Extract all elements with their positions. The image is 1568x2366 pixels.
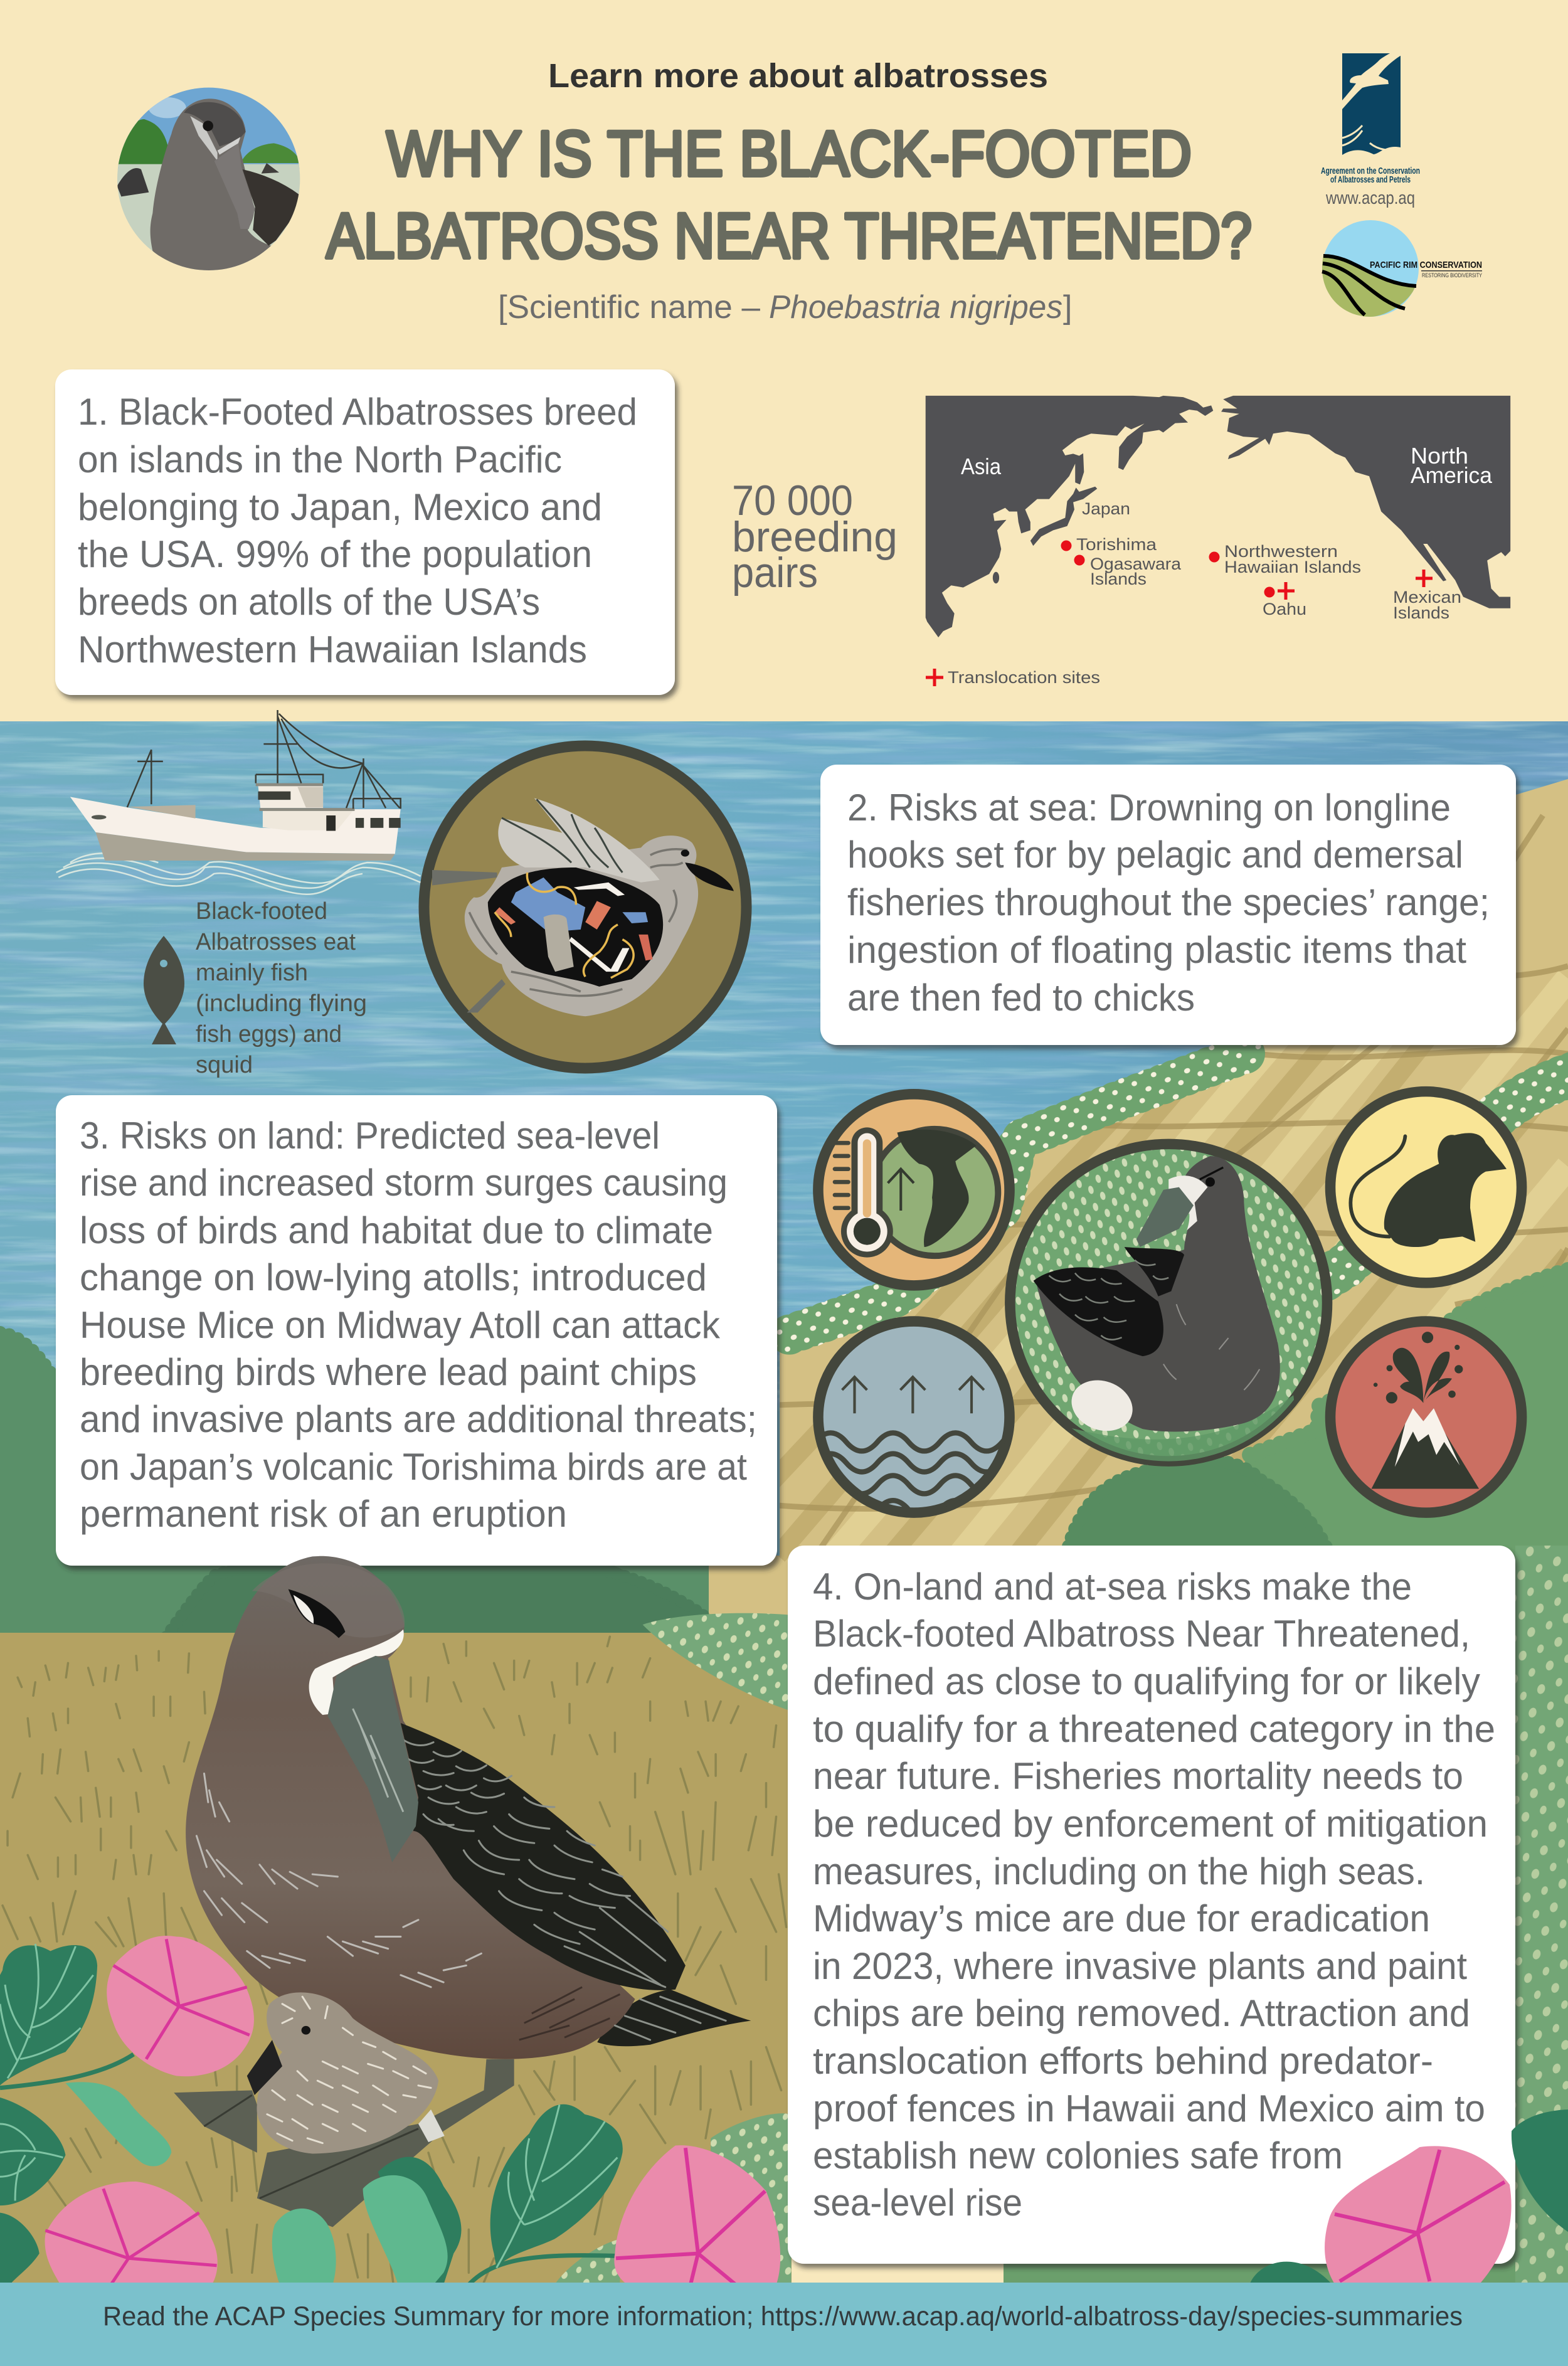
panel: card 2 risks at sea [820, 765, 1516, 1045]
panel: card 1 breeding [55, 369, 675, 695]
panel: card 2 risks at sea: fisheries throughout the species’ range; [847, 881, 1490, 923]
panel: card 4 near threatened: sea-level rise [813, 2182, 1022, 2224]
illustration: albatross on egg in circle [1010, 1144, 1327, 1478]
logo: Pacific Rim Conservation: RESTORING BIODIVERSITY [1422, 272, 1482, 279]
background: beach [690, 779, 1568, 1662]
chick tag [418, 2109, 445, 2142]
leaf 4 [0, 2213, 40, 2284]
illustration: fishing boat [56, 853, 421, 894]
eye [289, 1589, 345, 1638]
background: grass strokes [3, 1637, 787, 2283]
stat: 70 000 breeding pairs: pairs [732, 549, 818, 597]
illustration: flowers and leaves left [0, 1936, 780, 2284]
footer [0, 2283, 1568, 2366]
title: WHY IS THE BLACK-FOOTED [386, 118, 1192, 189]
chick beak [247, 2040, 282, 2095]
panel: card 4 near threatened: Black-footed Albatross Near Threatened, [813, 1613, 1470, 1655]
map: North Pacific: Northwestern [1224, 542, 1338, 561]
flower 2 [45, 2182, 218, 2284]
small leaf [1250, 2262, 1332, 2284]
map: North Pacific: Oahu [1263, 600, 1306, 618]
pink flower [1325, 2146, 1512, 2284]
logo: ACAP: of Albatrosses and Petrels [1330, 174, 1411, 185]
illustration: plastic in chick circle [424, 746, 746, 1068]
scientific name: ] [1063, 289, 1072, 326]
panel: card 4 near threatened: be reduced by enforcement of mitigation [813, 1803, 1488, 1845]
logo: ACAP: www.acap.aq [1325, 188, 1415, 208]
adult wing [401, 1723, 686, 1990]
panel: card 4 near threatened: measures, including on the high seas. [813, 1850, 1425, 1892]
map: North Pacific: Asia [961, 454, 1002, 479]
panel: card 1 breeding: the USA. 99% of the population [78, 533, 592, 575]
map: North Pacific: America [1411, 462, 1493, 488]
panel: card 1 breeding: belonging to Japan, Mexico and [78, 486, 602, 528]
text: diet: (including flying [196, 990, 367, 1017]
panel: card 4 near threatened: establish new colonies safe from [813, 2135, 1343, 2177]
map: North Pacific: Ogasawara [1090, 554, 1182, 573]
eye white [294, 1595, 314, 1624]
adult body [186, 1556, 635, 2059]
under-tail dark marks [519, 1987, 620, 2040]
panel: card 2 risks at sea: 2. Risks at sea: Drowning on longline [847, 787, 1451, 829]
beak [327, 1656, 418, 1862]
background: brown ground [0, 1633, 792, 2285]
flower 3 [614, 2145, 780, 2284]
panel: card 4 near threatened: proof fences in Hawaii and Mexico aim to [813, 2087, 1485, 2130]
icon: fish [144, 936, 184, 1044]
background: dotted shoreline strip [780, 1054, 1245, 1338]
body feather marks [196, 1773, 481, 1987]
logo: Pacific Rim Conservation [1322, 220, 1482, 317]
logo: ACAP: Agreement on the Conservation [1321, 166, 1420, 176]
panel: card 4 near threatened [788, 1546, 1515, 2264]
leaf 6 [363, 2157, 462, 2284]
map: North Pacific: Torishima [1076, 535, 1157, 554]
stat: 70 000 breeding pairs: 70 000 [732, 477, 853, 524]
background: sea [0, 721, 1568, 1662]
text: diet: Albatrosses eat [196, 929, 356, 955]
map: North Pacific: Translocation sites [948, 668, 1100, 687]
stem [0, 2054, 134, 2088]
panel: card 3 risks on land: on Japan’s volcanic Torishima birds are at [80, 1446, 747, 1488]
panel: card 3 risks on land: breeding birds where lead paint chips [80, 1351, 697, 1393]
panel: card 2 risks at sea: are then fed to chicks [847, 977, 1195, 1019]
footer: Read the ACAP Species Summary for more information; https://www.acap.aq/world-albatross-day/species-summaries [103, 2301, 1463, 2332]
adult tail [597, 1990, 751, 2046]
panel: card 3 risks on land [56, 1095, 777, 1566]
photo: black-footed albatross [115, 86, 303, 274]
title: ALBATROSS NEAR THREATENED? [326, 200, 1252, 272]
scientific name: Phoebastria nigripes [769, 289, 1062, 326]
text: diet: fish eggs) and [196, 1021, 342, 1048]
leaf 5 light [272, 2209, 336, 2284]
panel: card 1 breeding: breeds on atolls of the USA’s [78, 581, 540, 623]
flower 1 [107, 1936, 254, 2076]
map: North Pacific: Hawaiian Islands [1224, 558, 1361, 576]
panel: card 3 risks on land: rise and increased storm surges causing [80, 1162, 728, 1204]
illustration: adult albatross with chick [174, 1556, 751, 2227]
title [326, 118, 1252, 272]
panel: card 3 risks on land: House Mice on Midway Atoll can attack [80, 1304, 721, 1346]
panel: card 4 near threatened: near future. Fisheries mortality needs to [813, 1755, 1463, 1797]
map: North Pacific: Mexican [1393, 588, 1461, 607]
panel: card 2 risks at sea: ingestion of floating plastic items that [847, 929, 1466, 971]
map: North Pacific [926, 396, 1510, 687]
right leaf [1512, 2109, 1568, 2233]
icon: sea-level rise [815, 1322, 1034, 1519]
panel: card 4 near threatened: 4. On-land and at-sea risks make the [813, 1566, 1412, 1608]
head shading [252, 1563, 405, 1638]
panel: card 4 near threatened: chips are being removed. Attraction and [813, 1992, 1470, 2034]
leaf 1 [0, 1944, 97, 2086]
text: diet [196, 898, 367, 1078]
beak detail [353, 1709, 403, 1812]
text: diet: squid [196, 1052, 253, 1078]
wing feathers [403, 1740, 726, 2040]
panel: card 3 risks on land: permanent risk of an eruption [80, 1493, 567, 1535]
map: North Pacific: North [1411, 443, 1468, 469]
background: left hills [0, 1333, 715, 1637]
chick fluff [267, 1997, 431, 2143]
boat hull and cabin [70, 710, 401, 861]
panel: card 1 breeding: on islands in the North Pacific [78, 438, 562, 480]
illustration: flower and leaves on card 4 [1250, 2109, 1568, 2284]
chick body [257, 1992, 438, 2153]
panel: card 1 breeding: 1. Black-Footed Albatrosses breed [78, 391, 637, 433]
logo: ACAP [1321, 41, 1424, 208]
panel: card 3 risks on land: 3. Risks on land: Predicted sea-level [80, 1115, 660, 1157]
stat: 70 000 breeding pairs: breeding [732, 513, 898, 561]
panel: card 1 breeding: Northwestern Hawaiian Islands [78, 629, 587, 671]
chick eye [302, 2026, 310, 2035]
scientific name: [Scientific name – [498, 289, 760, 326]
panel: card 4 near threatened: in 2023, where invasive plants and paint [813, 1945, 1467, 1987]
heading: learn more: Learn more about albatrosses [548, 57, 1048, 95]
map: North Pacific: Japan [1082, 499, 1130, 518]
panel: card 2 risks at sea: hooks set for by pelagic and demersal [847, 834, 1463, 876]
panel: card 3 risks on land: change on low-lying atolls; introduced [80, 1256, 707, 1298]
adult legs and feet [174, 2059, 514, 2227]
panel: card 4 near threatened: to qualify for a threatened category in the [813, 1708, 1495, 1750]
scientific name [498, 289, 1072, 326]
panel: card 3 risks on land: loss of birds and habitat due to climate [80, 1209, 713, 1251]
stem 2 [469, 2256, 617, 2284]
leaf 3 [0, 2098, 65, 2205]
background: dotted green patches [554, 1613, 792, 2284]
icon: climate change thermometer and globe [818, 1094, 1010, 1285]
panel: card 4 near threatened: defined as close to qualifying for or likely [813, 1660, 1480, 1702]
background: second dotted strip [1254, 1074, 1568, 1324]
icon: mouse [1330, 1091, 1522, 1283]
panel: card 4 near threatened: Midway’s mice are due for eradication [813, 1897, 1430, 1939]
background: right hills [1004, 1270, 1568, 2283]
leaf 2 light [65, 2082, 171, 2167]
panel: threat icons [815, 1091, 1522, 1519]
boat waves [56, 853, 421, 894]
white face [309, 1630, 404, 1715]
text: diet: mainly fish [196, 960, 308, 986]
logo: Pacific Rim Conservation: PACIFIC RIM CONSERVATION [1370, 260, 1482, 270]
leaf 7 [490, 2104, 623, 2268]
map: North Pacific: Islands [1393, 603, 1449, 622]
icon: volcano [1330, 1322, 1522, 1513]
map: North Pacific: Islands [1090, 570, 1147, 588]
panel: card 4 near threatened: translocation efforts behind predator- [813, 2040, 1433, 2082]
stat: 70 000 breeding pairs [732, 477, 898, 597]
text: diet: Black-footed [196, 898, 327, 925]
panel: card 3 risks on land: and invasive plants are additional threats; [80, 1398, 757, 1440]
